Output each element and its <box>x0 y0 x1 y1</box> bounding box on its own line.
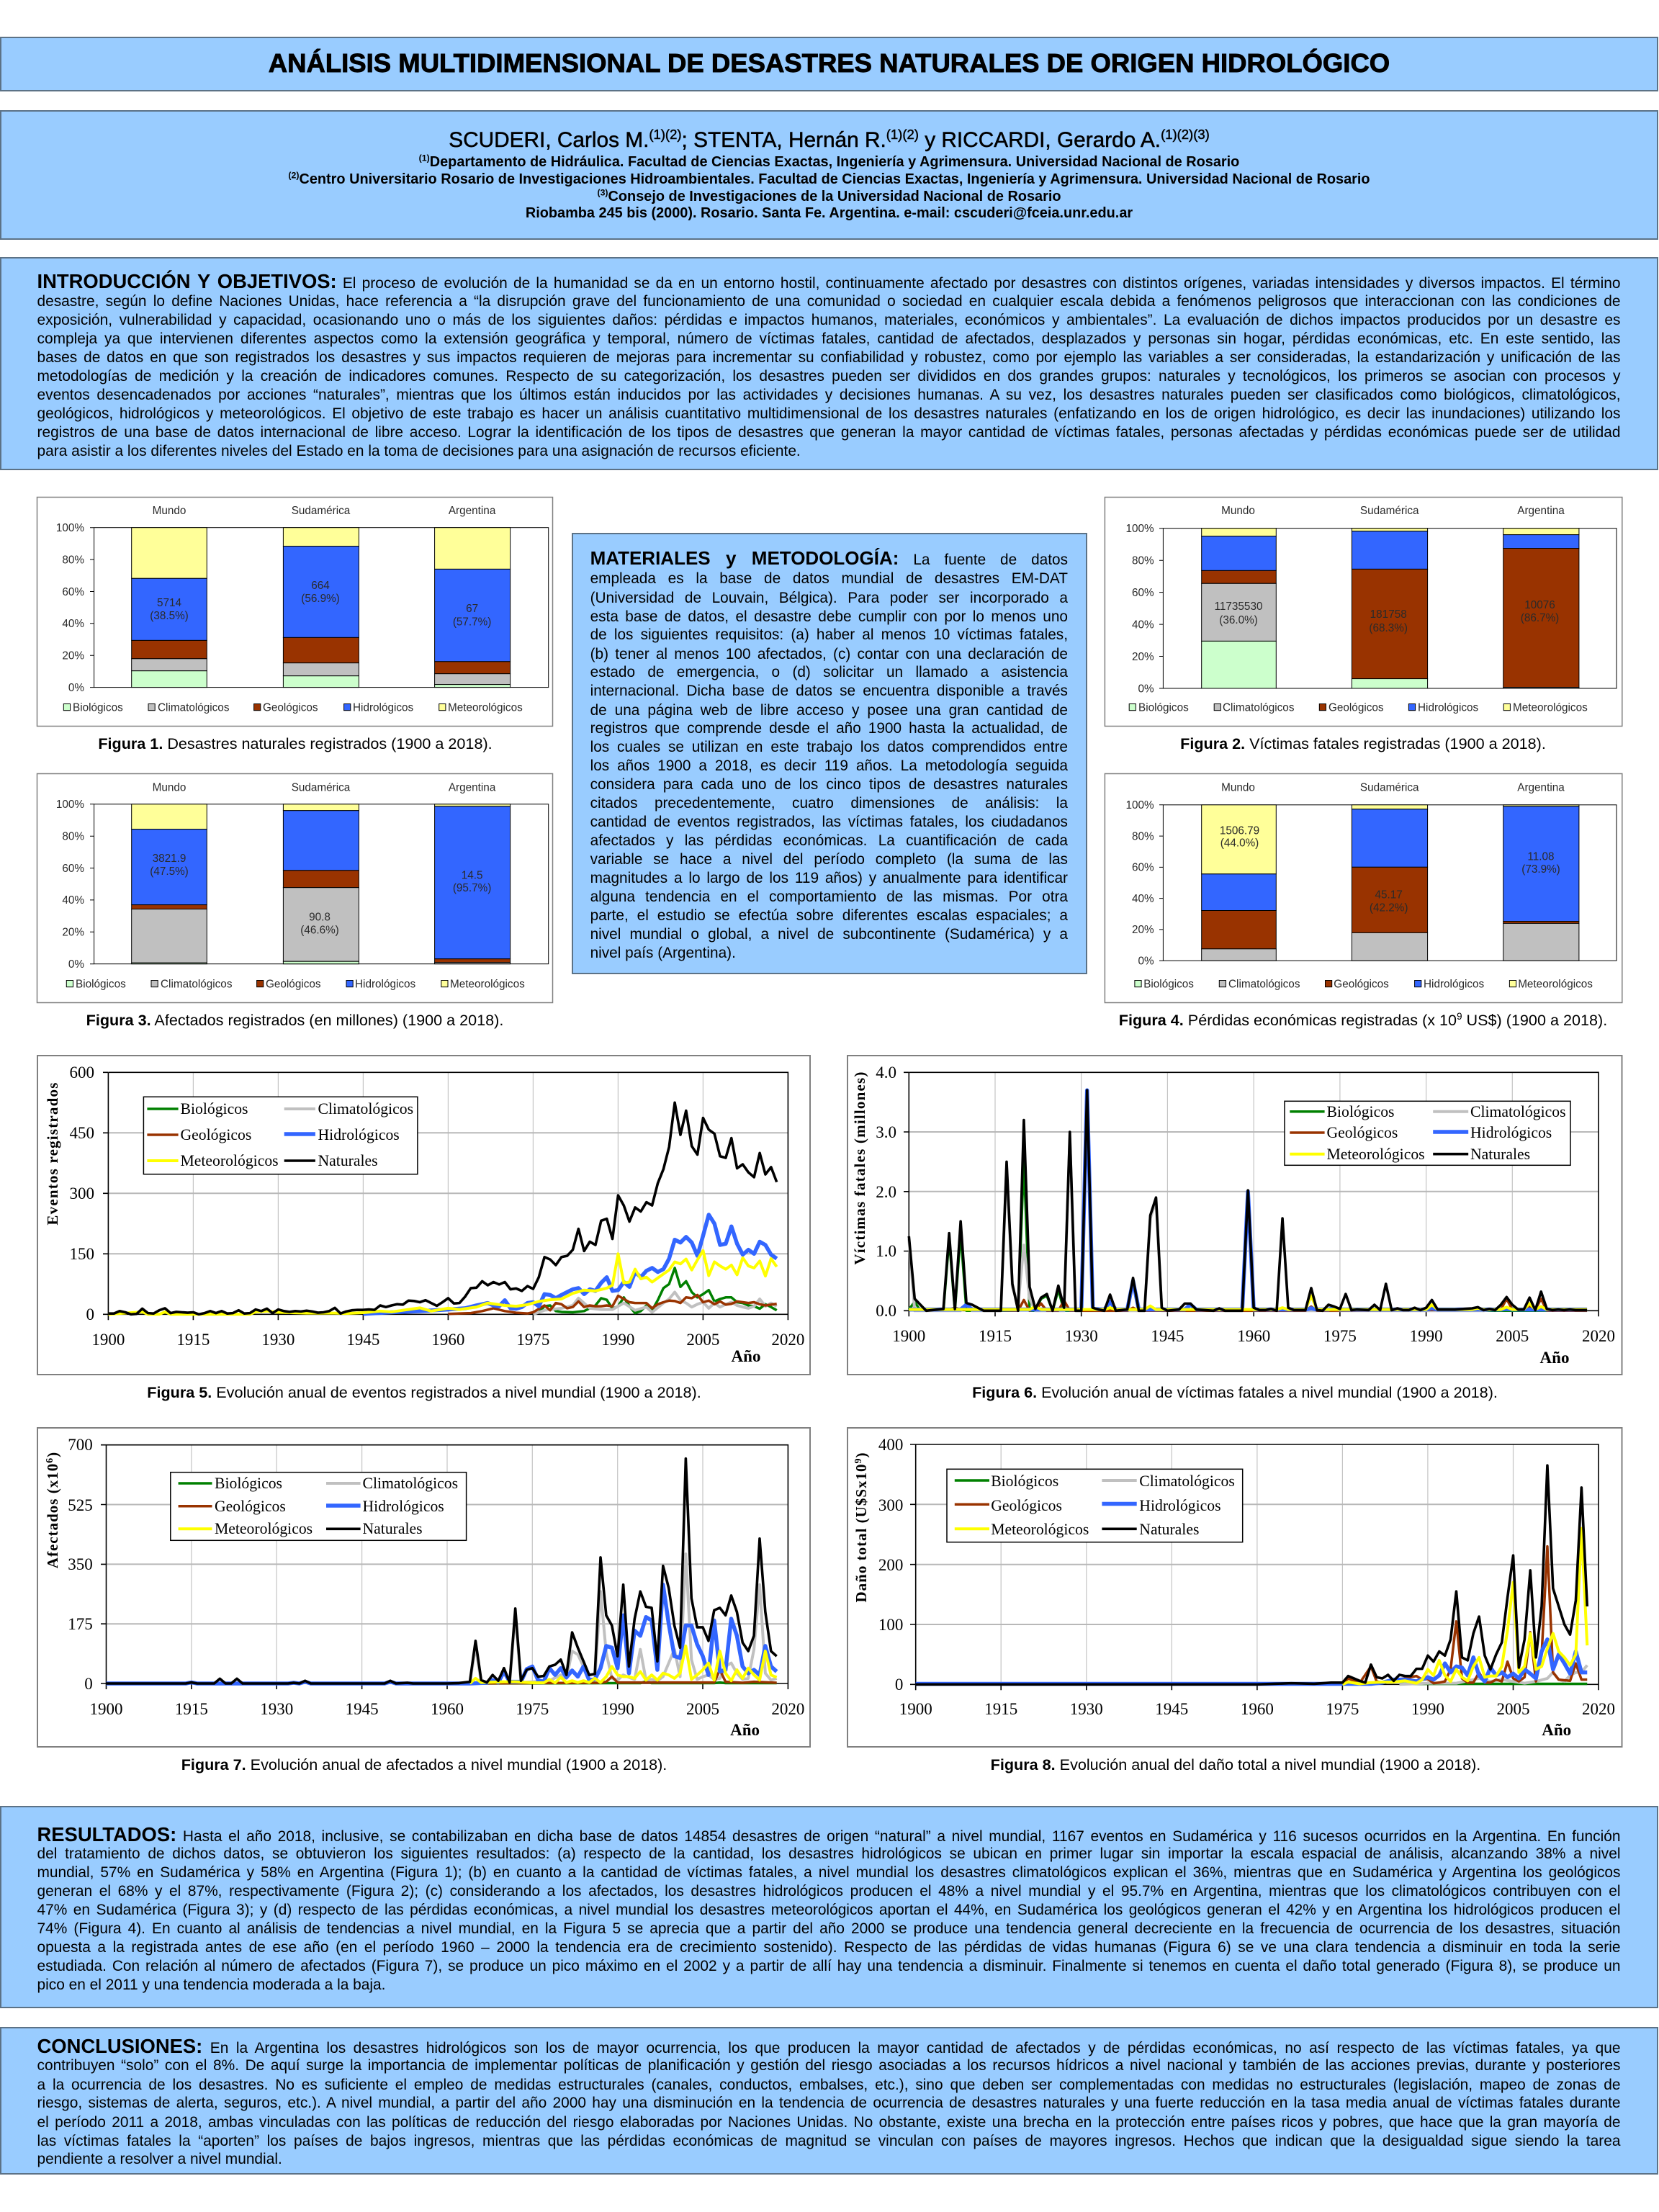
chart: figura 8 line chart daño total: 1960 <box>1241 1700 1274 1718</box>
legend: Biológicos <box>73 701 123 714</box>
bar: mundo <box>132 528 207 688</box>
value labels: 1506.79 <box>1220 825 1259 837</box>
affiliation 1: (1)Departamento de Hidráulica. Facultad de Ciencias Exactas, Ingeniería y Agrimensura. Universidad Nacional de Rosario <box>419 153 1239 170</box>
chart: figura 7 line chart afectados: ) <box>44 1452 61 1457</box>
legend: Hidrológicos <box>353 701 414 714</box>
legend: Meteorológicos <box>1513 701 1588 714</box>
legend: Hidrológicos <box>318 1126 400 1143</box>
chart: figura 8 line chart daño total: 2020 <box>1582 1700 1615 1718</box>
chart: figura 7 line chart afectados: 1930 <box>260 1700 293 1718</box>
chart: figura 4 stacked bars: 20% <box>1132 924 1154 936</box>
legend <box>1285 1101 1570 1165</box>
value labels <box>1215 599 1559 634</box>
panel: conclusiones: CONCLUSIONES: En la Argentina los desastres hidrológicos son los de mayor ocurrencia, los que producen la mayor cantidad de afectados y de pérdidas económicas, no así respecto de las víctimas fatales, ya que <box>37 2035 1620 2057</box>
chart: figura 4 stacked bars: 0% <box>1138 955 1154 968</box>
chart: figura 8 line chart daño total: 1975 <box>1326 1700 1359 1718</box>
chart: figura 2 stacked bars: Mundo <box>1221 505 1255 517</box>
panel: materiales y metodología: nivel país (Argentina). <box>590 945 736 961</box>
panel: introducción y objetivos: metodologías de medición y la creación de indicadores comunes. Respecto de su categorización, los desastres pueden ser divididos en dos grandes grupos: naturales y tecnológicos, los primeros se asocian con procesos y <box>37 368 1620 385</box>
legend: Geológicos <box>263 701 318 714</box>
panel: materiales y metodología: los cuales se utilizan en este trabajo los datos comprendidos entre <box>590 739 1068 755</box>
chart: figura 4 stacked bars <box>1105 773 1623 1004</box>
chart: figura 2 stacked bars: 40% <box>1132 619 1154 631</box>
panel: conclusiones: riesgo, sistemas de alerta, seguros, etc.). A nivel mundial, a partir del año 2000 hay una disminución en la tendencia de ocurrencia de desastres naturales y una fuerte reducción en la tasa media anual de víctimas fatales durante <box>37 2095 1620 2111</box>
legend: Climatológicos <box>1470 1103 1566 1120</box>
chart: figura 6 line chart víctimas: 1960 <box>1237 1327 1270 1345</box>
chart: figura 5 line chart eventos: 1930 <box>261 1331 295 1349</box>
chart: figura 7 line chart afectados: 525 <box>68 1496 93 1514</box>
data series <box>107 1459 777 1683</box>
legend: Climatológicos <box>318 1100 413 1118</box>
chart: figura 6 line chart víctimas: Año <box>1540 1349 1569 1367</box>
bar: sudamérica <box>1352 805 1428 961</box>
value labels: (47.5%) <box>150 866 189 878</box>
bar: argentina <box>435 528 511 688</box>
chart: figura 6 line chart víctimas: 1930 <box>1065 1327 1098 1345</box>
panel: resultados: 47% en Sudamérica (Figura 3); y (d) respecto de las pérdidas económicas, a nivel mundial los desastres meteorológicos aportan el 44%, en Sudamérica los geológicos generan el 42% y en Argentina los hidrológicos producen el <box>37 1902 1620 1918</box>
chart: figura 4 stacked bars: 80% <box>1132 831 1154 842</box>
chart: figura 7 line chart afectados: 1900 <box>89 1700 122 1718</box>
legend: Geológicos <box>266 978 321 991</box>
chart: figura 3 stacked bars: 60% <box>62 863 84 875</box>
chart: figura 4 stacked bars: 40% <box>1132 893 1154 905</box>
chart: figura 2 stacked bars: 100% <box>1125 523 1154 535</box>
chart: figura 7 line chart afectados: 1915 <box>175 1700 208 1718</box>
panel: introducción y objetivos: INTRODUCCIÓN Y OBJETIVOS: El proceso de evolución de la humanidad se da en un entorno hostil, continuamente afectado por desastres con distintos orígenes, variadas intensidades y diversos impactos. El término <box>37 270 1621 292</box>
panel: materiales y metodología: afectados y las pérdidas económicas. La cuantificación de cada <box>590 832 1068 849</box>
chart: figura 7 line chart afectados: Afectados (x10 <box>44 1463 61 1568</box>
panel: resultados: mundial, 57% en Sudamérica y 58% en Argentina (Figura 1); (b) en cuanto a la cantidad de víctimas fatales, a nivel mundial los desastres climatológicos explican el 36%, mientras que en Sudamérica y Argentina los geológicos <box>37 1864 1620 1881</box>
chart: figura 5 line chart eventos: Año <box>732 1347 760 1365</box>
legend: Hidrológicos <box>1139 1497 1221 1514</box>
chart: figura 6 line chart víctimas: 1975 <box>1323 1327 1357 1345</box>
legend: Geológicos <box>180 1126 251 1143</box>
legend: Biológicos <box>1138 701 1189 714</box>
panel: conclusiones: a la ocurrencia de los desastres. No es suficiente el empleo de medidas estructurales (canales, conductos, embalses, etc.), sino que deben ser complementadas con medidas no estructurales (legislación, mapeo de zonas de <box>37 2077 1620 2093</box>
chart: figura 5 line chart eventos <box>37 1055 811 1375</box>
panel: materiales y metodología: variable se hace a nivel del período completo (la suma de las <box>590 851 1068 867</box>
chart: figura 8 line chart daño total: 2005 <box>1496 1700 1529 1718</box>
chart: figura 7 line chart afectados: Año <box>730 1721 760 1739</box>
chart: figura 2 stacked bars: 80% <box>1132 554 1154 567</box>
chart: figura 5 line chart eventos: 600 <box>69 1064 94 1082</box>
panel: materiales y metodología: los años 1900 a 2018, es decir 119 años. La metodología seguida <box>590 757 1068 774</box>
chart: figura 6 line chart víctimas: 2005 <box>1496 1327 1529 1345</box>
legend: Climatológicos <box>363 1475 458 1492</box>
legend <box>1129 701 1588 714</box>
chart: figura 4 stacked bars: Sudamérica <box>1360 782 1419 793</box>
chart: figura 6 line chart víctimas: 1.0 <box>876 1242 896 1260</box>
value labels: 11.08 <box>1527 851 1555 863</box>
chart: figura 5 line chart eventos: 150 <box>69 1245 94 1263</box>
legend: Naturales <box>1139 1521 1199 1538</box>
legend: Biológicos <box>180 1100 248 1118</box>
legend: Hidrológicos <box>1418 701 1479 714</box>
panel: introducción y objetivos: geológicos, hidrológicos y meteorológicos. El objetivo de este trabajo es hacer un análisis cuantitativo multidimensional de los desastres naturales (enfatizando en los de origen hidrológico, es decir las inundaciones) utilizando los <box>37 405 1620 422</box>
chart: figura 7 line chart afectados: 1960 <box>431 1700 464 1718</box>
chart: figura 3 stacked bars: 100% <box>56 799 84 811</box>
chart: figura 2 stacked bars: Sudamérica <box>1360 505 1419 517</box>
chart: figura 6 line chart víctimas: 2020 <box>1582 1327 1615 1345</box>
legend: Climatológicos <box>1228 978 1300 991</box>
panel: materiales y metodología: de los siguientes requisitos: (a) haber al menos 10 víctimas fatales, <box>590 626 1068 643</box>
chart: figura 4 stacked bars: Argentina <box>1517 782 1565 793</box>
panel: materiales y metodología: de una página web de libre acceso y posee una gran cantidad de <box>590 702 1068 719</box>
value labels: 181758 <box>1370 608 1407 621</box>
chart: figura 7 line chart afectados: 1990 <box>601 1700 634 1718</box>
bar: sudamérica <box>283 528 359 688</box>
chart: figura 4 stacked bars: 60% <box>1132 861 1154 874</box>
chart: figura 8 line chart daño total: ) <box>853 1452 870 1457</box>
chart: figura 3 stacked bars <box>36 773 553 1004</box>
legend <box>1135 978 1593 991</box>
legend: Geológicos <box>215 1498 286 1515</box>
bar: mundo <box>1202 529 1276 688</box>
panel: conclusiones: pendiente a resolver a nivel mundial. <box>37 2151 282 2167</box>
legend: Climatológicos <box>161 978 233 991</box>
legend: Hidrológicos <box>1470 1124 1552 1141</box>
chart: figura 3 stacked bars: Mundo <box>153 782 186 793</box>
panel: resultados: RESULTADOS: Hasta el año 2018, inclusive, se contabilizaban en dicha base de datos 14854 desastres de origen “natural” a nivel mundial, 1167 eventos en Sudamérica y 116 sucesos ocurridos en la Argentina. En función <box>37 1823 1620 1845</box>
chart: figura 1 stacked bars: 80% <box>62 554 84 566</box>
chart: figura 8 line chart daño total: 400 <box>878 1436 903 1454</box>
panel: materiales y metodología: citados precedentemente, cuatro dimensiones de análisis: la <box>590 795 1068 811</box>
legend: Biológicos <box>76 978 126 991</box>
chart: figura 5 line chart eventos: 1960 <box>431 1331 464 1349</box>
legend: Meteorológicos <box>448 701 523 714</box>
legend: Biológicos <box>1326 1103 1394 1120</box>
chart: figura 8 line chart daño total: 100 <box>878 1616 903 1634</box>
panel: materiales y metodología: considera para cada uno de los cinco tipos de desastres naturales <box>590 776 1068 792</box>
bar: argentina <box>1503 529 1579 688</box>
panel: materiales y metodología: nivel mundial o global, a nivel de subcontinente (Sudamérica) y a <box>590 926 1068 943</box>
chart: figura 7 line chart afectados: 1975 <box>516 1700 549 1718</box>
affiliation 3: (3)Consejo de Investigaciones de la Universidad Nacional de Rosario <box>597 187 1061 204</box>
panel: authors <box>0 110 1658 240</box>
value labels: (68.3%) <box>1369 622 1408 634</box>
legend: Geológicos <box>1328 701 1384 714</box>
bar: mundo <box>1202 805 1276 961</box>
panel: introducción y objetivos: desastre, según lo define Naciones Unidas, hace referencia a “la disrupción grave del funcionamiento de una comunidad o sociedad en cualquier escala debida a fenómenos peligrosos que interaccionan con las condiciones de <box>37 293 1620 310</box>
legend: Climatológicos <box>158 701 230 714</box>
value labels: (73.9%) <box>1521 863 1560 876</box>
panel: materiales y metodología: parte, el estudio se efectúa sobre diferentes escalas espaciales; a <box>590 907 1068 923</box>
chart: figura 6 line chart víctimas: 1990 <box>1410 1327 1443 1345</box>
chart: figura 8 line chart daño total: 1945 <box>1155 1700 1188 1718</box>
chart: figura 8 line chart daño total: Año <box>1542 1721 1571 1739</box>
chart: figura 8 line chart daño total: 1915 <box>984 1700 1017 1718</box>
legend: Climatológicos <box>1223 701 1295 714</box>
chart: figura 8 line chart daño total: Daño total (U$Sx10 <box>853 1463 870 1603</box>
value labels: (57.7%) <box>453 616 491 628</box>
authors: SCUDERI, Carlos M.(1)(2); STENTA, Hernán R.(1)(2) y RICCARDI, Gerardo A.(1)(2)(3) <box>449 127 1210 152</box>
panel: materiales y metodología: (Universidad de Louvain, Bélgica). Para poder ser incorporado a <box>590 590 1068 606</box>
legend: Hidrológicos <box>1424 978 1485 991</box>
chart: figura 5 line chart eventos: 1990 <box>601 1331 634 1349</box>
chart: figura 7 line chart afectados: 2005 <box>686 1700 719 1718</box>
panel: introducción y objetivos: compleja ya que intervienen diferentes aspectos como la extensión geográfica y temporal, número de víctimas fatales, cantidad de afectados, desplazados y personas sin hogar, pérdidas económicas, etc. En este sentido, las <box>37 331 1620 347</box>
caption: figura 2: Figura 2. Víctimas fatales registradas (1900 a 2018). <box>1180 734 1546 752</box>
chart: figura 8 line chart daño total: 300 <box>878 1496 903 1514</box>
chart: figura 3 stacked bars: Argentina <box>449 782 496 793</box>
bar: sudamérica <box>283 804 359 964</box>
chart: figura 6 line chart víctimas <box>847 1055 1623 1375</box>
chart: figura 6 line chart víctimas: 1945 <box>1151 1327 1184 1345</box>
data series <box>108 1102 777 1314</box>
chart: figura 7 line chart afectados <box>37 1427 811 1748</box>
chart: figura 1 stacked bars: Sudamérica <box>292 505 351 517</box>
value labels: 10076 <box>1524 599 1555 611</box>
chart: figura 8 line chart daño total <box>847 1427 1623 1748</box>
panel: introducción y objetivos: exposición, vulnerabilidad y capacidad, ocasionando uno o más de los siguientes daños: pérdidas e impactos humanos, materiales, económicos y ambientales”. La evaluación de dichos impactos producidos por un desastre es <box>37 312 1620 328</box>
chart: figura 5 line chart eventos: Eventos registrados <box>44 1082 61 1226</box>
chart: figura 4 stacked bars: Mundo <box>1221 782 1255 793</box>
chart: figura 8 line chart daño total: 0 <box>895 1676 903 1694</box>
value labels: (38.5%) <box>150 610 189 622</box>
value labels: (56.9%) <box>301 593 340 605</box>
value labels: (36.0%) <box>1219 614 1258 626</box>
caption: figura 8: Figura 8. Evolución anual del daño total a nivel mundial (1900 a 2018). <box>991 1755 1480 1773</box>
panel: resultados: generan el 68% y el 87%, respectivamente (Figura 2); (c) considerando a los afectados, los desastres hidrológicos producen el 48% a nivel mundial y el 95.7% en Argentina, mientras que los climatológicos contribuyen con el <box>37 1883 1620 1899</box>
caption: figura 1: Figura 1. Desastres naturales registrados (1900 a 2018). <box>98 734 493 752</box>
chart: figura 7 line chart afectados: 2020 <box>771 1700 804 1718</box>
legend: Meteorológicos <box>450 978 525 991</box>
chart: figura 6 line chart víctimas: 3.0 <box>876 1123 896 1141</box>
chart: figura 6 line chart víctimas: Víctimas fatales (millones) <box>851 1071 868 1265</box>
panel: conclusiones: las víctimas fatales la “aporten” los países de bajos ingresos, mientras que las pérdidas económicas de magnitud se vinculan con países de mayores ingresos. Hechos que indican que la desigualdad sigue siendo la tarea <box>37 2133 1620 2149</box>
legend <box>171 1473 467 1540</box>
caption: figura 6: Figura 6. Evolución anual de víctimas fatales a nivel mundial (1900 a 2018). <box>972 1383 1498 1401</box>
chart: figura 1 stacked bars: 0% <box>68 682 84 694</box>
chart: figura 8 line chart daño total: 9 <box>853 1457 864 1463</box>
value labels: 14.5 <box>462 870 482 881</box>
chart: figura 6 line chart víctimas: 1915 <box>979 1327 1012 1345</box>
chart: figura 3 stacked bars: 40% <box>62 894 84 907</box>
chart: figura 7 line chart afectados: 0 <box>84 1675 93 1693</box>
panel: materiales y metodología: alguna tendencia en el comportamiento de las mismas. Por otra <box>590 889 1068 905</box>
chart: figura 2 stacked bars: 20% <box>1132 651 1154 663</box>
panel: title <box>0 37 1658 91</box>
panel: resultados <box>0 1806 1658 2008</box>
legend: Naturales <box>363 1520 423 1537</box>
value labels: 5714 <box>157 597 182 609</box>
chart: figura 5 line chart eventos: 450 <box>69 1124 94 1142</box>
chart: figura 5 line chart eventos: 2005 <box>686 1331 719 1349</box>
chart: figura 1 stacked bars <box>36 497 553 727</box>
legend: Meteorológicos <box>991 1521 1089 1538</box>
value labels: 664 <box>311 580 330 592</box>
caption: figura 4: Figura 4. Pérdidas económicas registradas (x 109 US$) (1900 a 2018). <box>1119 1010 1607 1028</box>
legend <box>947 1469 1243 1542</box>
panel: conclusiones <box>0 2027 1658 2175</box>
legend: Naturales <box>1470 1146 1530 1163</box>
chart: figura 1 stacked bars: Mundo <box>153 505 186 517</box>
chart: figura 5 line chart eventos: 2020 <box>771 1331 804 1349</box>
legend <box>66 978 525 991</box>
panel: resultados: del tratamiento de dichos datos, se obtuvieron los siguientes resultados: (a) respecto de la cantidad, los desastres hidrológicos se ubican en primer lugar sin importar la escala espacial de análisis, alcanzando 38% a nivel <box>37 1845 1620 1862</box>
chart: figura 1 stacked bars: 20% <box>62 649 84 662</box>
value labels: (86.7%) <box>1521 612 1559 624</box>
chart: figura 7 line chart afectados: 700 <box>68 1436 93 1454</box>
caption: figura 7: Figura 7. Evolución anual de afectados a nivel mundial (1900 a 2018). <box>181 1755 667 1773</box>
value labels <box>150 580 491 628</box>
panel: introducción y objetivos: eventos desencadenados por acciones “naturales”, mientras que los últimos están inducidos por las actividades y decisiones humanas. A su vez, los desastres naturales pueden ser clasificados como biológicos, climatológicos, <box>37 387 1620 403</box>
chart: figura 5 line chart eventos: 1900 <box>91 1331 125 1349</box>
chart: figura 2 stacked bars: 60% <box>1132 587 1154 599</box>
chart: figura 7 line chart afectados: 1945 <box>346 1700 379 1718</box>
chart: figura 8 line chart daño total: 1990 <box>1411 1700 1444 1718</box>
caption: figura 5: Figura 5. Evolución anual de eventos registrados a nivel mundial (1900 a 2018). <box>147 1383 701 1401</box>
panel: materiales y metodología: estado de emergencia, o (d) solicitar un llamado a asistencia <box>590 664 1068 680</box>
legend: Geológicos <box>1334 978 1389 991</box>
panel: introducción y objetivos: registros de una base de datos internacional de libre acceso. Lograr la identificación de los tipos de desastres que generan la mayor cantidad de víctimas fatales, personas afectadas y pérdidas económicas puede ser de utilidad <box>37 424 1620 441</box>
chart: figura 1 stacked bars: 60% <box>62 586 84 598</box>
chart: figura 5 line chart eventos: 0 <box>86 1305 94 1323</box>
chart: figura 4 stacked bars: 100% <box>1125 799 1154 811</box>
caption: figura 3: Figura 3. Afectados registrados (en millones) (1900 a 2018). <box>86 1011 503 1028</box>
panel: materiales y metodología: internacional. Dicha base de datos se encuentra disponible a través <box>590 683 1068 699</box>
panel: materiales y metodología: esta base de datos, el desastre debe cumplir con por lo menos uno <box>590 608 1068 625</box>
panel: introducción y objetivos: para asistir a los diferentes niveles del Estado en la toma de decisiones para una asignación de recursos eficiente. <box>37 443 801 459</box>
chart: figura 6 line chart víctimas: 4.0 <box>876 1064 896 1082</box>
legend: Naturales <box>318 1152 378 1169</box>
chart: figura 6 line chart víctimas: 2.0 <box>876 1183 896 1201</box>
legend: Biológicos <box>991 1473 1058 1490</box>
bar: argentina <box>435 804 511 964</box>
data series <box>909 1090 1587 1310</box>
contact address: Riobamba 245 bis (2000). Rosario. Santa Fe. Argentina. e-mail: cscuderi@fceia.unr.edu.ar <box>526 205 1133 221</box>
bar: argentina <box>1503 805 1579 961</box>
panel: materiales y metodología: empleada es la base de datos mundial de desastres EM-DAT <box>590 570 1068 587</box>
value labels <box>150 853 491 936</box>
value labels: (46.6%) <box>300 925 339 936</box>
legend: Biológicos <box>215 1475 282 1492</box>
panel: resultados: opuesta a la registrada antes de ese año (en el período 1960 – 2000 la tendencia era de crecimiento sostenido). Respecto de las pérdidas de vidas humanas (Figura 6) se ve una clara tendencia a disminuir en toda la serie <box>37 1939 1620 1956</box>
legend: Hidrológicos <box>355 978 416 991</box>
chart: figura 5 line chart eventos: 1945 <box>346 1331 379 1349</box>
chart: figura 8 line chart daño total: 1900 <box>899 1700 932 1718</box>
value labels <box>1220 825 1560 914</box>
panel: introducción y objetivos <box>0 257 1658 470</box>
chart: figura 2 stacked bars <box>1105 497 1623 727</box>
panel: resultados: estudiada. Con relación al número de afectados (Figura 7), se produce un pico máximo en el 2002 y a partir de allí hay una tendencia a disminuir. Finalmente si tenemos en cuenta el daño total generado (Figura 8), se produce un <box>37 1958 1620 1974</box>
chart: figura 7 line chart afectados: 175 <box>68 1615 93 1633</box>
legend: Hidrológicos <box>363 1498 444 1515</box>
panel: resultados: 74% (Figura 4). En cuanto al análisis de tendencias a nivel mundial, en la Figura 5 se aprecia que a partir del año 2000 se produce una tendencia general decreciente en la frecuencia de ocurrencia de los desastres, situación <box>37 1920 1620 1937</box>
chart: figura 1 stacked bars: 100% <box>56 522 84 534</box>
chart: figura 8 line chart daño total: 1930 <box>1070 1700 1103 1718</box>
value labels: (44.0%) <box>1220 837 1259 850</box>
legend: Meteorológicos <box>1326 1146 1425 1163</box>
legend: Climatológicos <box>1139 1473 1235 1490</box>
value labels: 11735530 <box>1215 601 1262 613</box>
chart: figura 5 line chart eventos: 1975 <box>516 1331 549 1349</box>
chart: figura 3 stacked bars: Sudamérica <box>292 782 351 793</box>
chart: figura 3 stacked bars: 80% <box>62 831 84 842</box>
panel: resultados: pico en el 2011 y una tendencia moderada a la baja. <box>37 1977 385 1993</box>
chart: figura 2 stacked bars: 0% <box>1138 683 1154 696</box>
chart: figura 8 line chart daño total: 200 <box>878 1556 903 1574</box>
legend: Meteorológicos <box>1518 978 1593 991</box>
bar: sudamérica <box>1352 529 1428 688</box>
legend: Geológicos <box>1326 1124 1398 1141</box>
legend: Meteorológicos <box>215 1520 313 1537</box>
legend <box>63 701 523 714</box>
chart: figura 3 stacked bars: 0% <box>68 958 84 971</box>
legend: Biológicos <box>1143 978 1194 991</box>
chart: figura 2 stacked bars: Argentina <box>1517 505 1565 517</box>
value labels: (42.2%) <box>1370 902 1408 914</box>
panel: introducción y objetivos: bases de datos en que son registrados los desastres y sus impactos requieren de mejoras para incrementar su confiabilidad y robustez, como por ejemplo las variables a ser consideradas, la estandarización y unificación de las <box>37 349 1620 366</box>
chart: figura 7 line chart afectados: 350 <box>68 1555 93 1573</box>
value labels: (95.7%) <box>453 882 491 894</box>
value labels: 90.8 <box>309 912 331 923</box>
legend: Meteorológicos <box>180 1152 279 1169</box>
value labels: 45.17 <box>1375 889 1403 902</box>
panel: materiales y metodología <box>572 533 1087 974</box>
panel: materiales y metodología: (b) tener al menos 100 afectados, (c) contar con una declaración de <box>590 646 1068 662</box>
chart: figura 1 stacked bars: Argentina <box>449 505 496 517</box>
data series <box>916 1465 1587 1684</box>
legend <box>143 1097 418 1174</box>
chart: figura 5 line chart eventos: 1915 <box>176 1331 210 1349</box>
chart: figura 6 line chart víctimas: 0.0 <box>876 1302 896 1320</box>
panel: materiales y metodología: magnitudes a lo largo de los 119 años) y anualmente para identificar <box>590 870 1068 886</box>
chart: figura 5 line chart eventos: 300 <box>69 1184 94 1202</box>
panel: materiales y metodología: cantidad de eventos registrados, las víctimas fatales, los ciudadanos <box>590 814 1068 830</box>
chart: figura 1 stacked bars: 40% <box>62 618 84 630</box>
value labels: 67 <box>466 603 478 615</box>
panel: conclusiones: contribuyen “solo” con el 8%. De aquí surge la importancia de implementar políticas de planificación y gestión del riesgo asociadas a los recursos hídricos a nivel nacional y también de las acciones previas, durante y posteriores <box>37 2057 1620 2074</box>
title: ANÁLISIS MULTIDIMENSIONAL DE DESASTRES NATURALES DE ORIGEN HIDROLÓGICO <box>269 48 1390 78</box>
chart: figura 6 line chart víctimas: 1900 <box>892 1327 925 1345</box>
panel: materiales y metodología: registros que comprende desde el año 1900 hasta la actualidad, de <box>590 720 1068 737</box>
legend: Geológicos <box>991 1497 1062 1514</box>
chart: figura 3 stacked bars: 20% <box>62 926 84 939</box>
affiliation 2: (2)Centro Universitario Rosario de Investigaciones Hidroambientales. Facultad de Ciencias Exactas, Ingeniería y Agrimensura. Universidad Nacional de Rosario <box>288 170 1370 187</box>
bar: mundo <box>132 804 207 964</box>
chart: figura 7 line chart afectados: 6 <box>45 1457 55 1463</box>
panel: conclusiones: el período 2011 a 2018, ambas vinculadas con las políticas de reducción del riesgo elaboradas por Naciones Unidas. No obstante, existe una brecha en la protección entre países ricos y pobres, que hace que la gran mayoría de <box>37 2114 1620 2131</box>
value labels: 3821.9 <box>153 853 186 865</box>
panel: materiales y metodología: MATERIALES y METODOLOGÍA: La fuente de datos <box>590 547 1068 569</box>
